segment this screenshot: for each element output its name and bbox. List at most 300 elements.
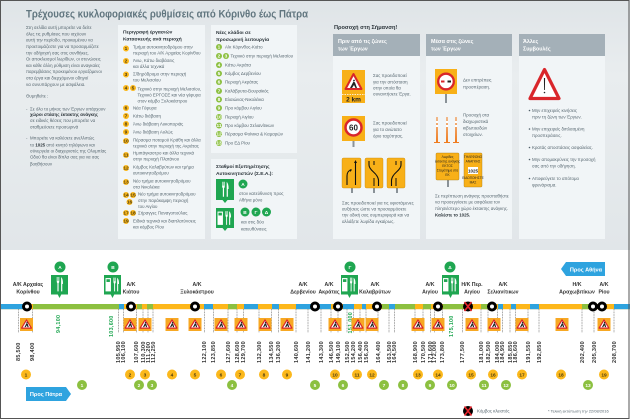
text: no overtaking: προσπέραση. — [463, 84, 490, 90]
intro text block: σταθμεύσετε προσωρινά — [30, 124, 79, 130]
badges B G D with note: κατευθύνσεις — [241, 226, 267, 232]
panel: new branches in temporary operation — [211, 25, 297, 153]
road strip with status segments — [0, 304, 630, 309]
kilometre labels: 205,300 — [592, 341, 598, 363]
kilometre labels: 111,200 — [146, 342, 152, 363]
kilometre labels: 134,550 — [269, 341, 275, 363]
text: separators: διαχωριστικά — [463, 119, 489, 124]
numbered works list: στα Νικολέικα — [133, 184, 160, 190]
panel header: Συμβουλές — [523, 46, 551, 52]
badges B G D with note — [240, 208, 271, 232]
yellow work number badges: 1 — [25, 372, 28, 378]
kilometre labels: 168,900 — [413, 341, 419, 363]
rest area: D — [442, 262, 459, 298]
interchange labels: Α/Κ — [600, 282, 609, 288]
panel header: Άλλες — [523, 39, 538, 45]
icon: emergency info signs: 1025 — [468, 168, 479, 174]
kilometre labels: 163,500 — [387, 341, 393, 363]
rest area: B: Β — [111, 265, 115, 271]
badges B G D with note: Γ — [255, 210, 258, 216]
kilometre labels: 181,000 — [479, 341, 485, 363]
kilometre labels: 164,500 — [392, 341, 398, 363]
numbered works list: 19 — [123, 218, 129, 224]
numbered works list: Άνω, Κάτω διαβάσεις — [133, 58, 174, 63]
numbered works list: Άνω διάβαση Αυλώς — [133, 130, 173, 134]
yellow work number badges: 8 — [263, 372, 266, 378]
legend: closed junction — [463, 406, 509, 416]
panel heading: Κατασκευής ανά περιοχή — [123, 36, 182, 42]
intro text block: σύνεργεία οι διαχειριστές της Ολυμπίας — [30, 148, 106, 154]
tips list: σας από την οδήγηση. — [532, 164, 576, 168]
numbered branches list: Προ κόμβου Σελιανίτικων — [225, 123, 275, 128]
kilometre labels: 202,400 — [580, 341, 586, 363]
yellow work number badges: 12 — [369, 372, 375, 378]
tips list: Αποφεύγετε το απότομο — [532, 176, 580, 181]
intro text block: Οι αποκλεισμοί λωρίδων, οι στενώσεις — [26, 56, 101, 62]
numbered works list: και άλλα τεχνικά — [133, 64, 165, 69]
interchange labels: Α/Κ — [325, 282, 334, 288]
green branch number badges: 7 — [383, 383, 386, 389]
green station km labels: 103,600 — [109, 315, 115, 337]
intro text block: χώροι στάσης έκτακτης ανάγκης — [30, 112, 99, 117]
interchange labels: Καλαβρύτων — [359, 290, 391, 296]
green branch number badges: 13 — [585, 383, 591, 389]
panel header: Πριν από τις ζώνες — [338, 39, 387, 45]
panel: works by area — [118, 25, 205, 239]
rest area: B — [104, 262, 121, 298]
numbered works list: 13 — [123, 180, 129, 186]
intro text block: - — [26, 106, 28, 112]
kilometre labels: 152,500 — [345, 341, 351, 363]
numbered works list: 2 — [125, 58, 128, 64]
kilometre labels: 106,100 — [121, 341, 127, 363]
green branch number badges — [77, 380, 593, 390]
kilometre labels: 98,400 — [30, 342, 36, 361]
numbered works list: 10 — [123, 138, 129, 144]
panel: service stations — [211, 159, 297, 239]
text: no overtaking: Δεν επιτρέπεις — [463, 78, 492, 82]
intro text block: Στη σελίδα αυτή μπορείτε να δείτε — [26, 25, 92, 30]
interchange labels: Α/Κ — [499, 282, 508, 288]
green branch number badges: 4 — [231, 383, 234, 389]
intro text block: να συνυπάρχουν με ασφάλεια. — [26, 82, 85, 87]
text: speed limit: για το ανώτατο — [373, 127, 402, 132]
kilometre labels: 146,500 — [329, 341, 335, 363]
numbered branches list: Περιοχή Αιγίου — [225, 114, 254, 120]
numbered works list: 14 — [123, 192, 129, 198]
text: lane change: την οδική σας συμπεριφορά και να — [342, 212, 410, 218]
numbered branches list — [216, 44, 294, 146]
numbered works list: 9 — [125, 130, 128, 136]
tips list: προσπεράσεις. — [532, 133, 562, 138]
green station km labels: 151,000 — [348, 312, 354, 334]
intro text block: βοηθήσουν — [30, 162, 53, 166]
kilometre labels: 107,600 — [134, 341, 140, 363]
kilometre labels: 110,300 — [141, 341, 147, 363]
text: separators: στοιχείων. — [463, 132, 483, 137]
numbered works list: του Αιγίου — [138, 204, 158, 209]
yellow work number badges: 4 — [171, 372, 174, 378]
kilometre labels: 156,400 — [358, 341, 364, 363]
intro text block: στα έργα και διερχόμενοι οδηγοί — [26, 76, 88, 80]
kilometre labels: 129,700 — [241, 341, 247, 363]
numbered works list: Τμήμα αυτοκινητοδρόμου στην — [133, 44, 193, 50]
intro text block: Οδού θα είναι δίπλα σας για να σας — [30, 154, 99, 160]
kilometre labels: 123,850 — [211, 341, 217, 363]
numbered branches list: 7 — [218, 88, 221, 94]
intro text block: προετοιμάζεστε για να προσαρμόζετε — [26, 44, 99, 49]
text: separators: κιβωτοειδών — [463, 126, 488, 130]
interchange labels: Α/Κ — [299, 282, 308, 288]
icon: lane change signs — [342, 158, 405, 193]
text: emergency instructions: Σε περίπτωση ανάγκης προσπαθήστε — [435, 194, 509, 198]
numbered works list: Ημιπάγκαστρο και άλλα τεχνικά — [133, 150, 194, 156]
kilometre labels: 136,200 — [276, 341, 282, 363]
numbered branches list: 9 — [218, 106, 221, 112]
numbered works list: Σήραγγες Παναγοπούλας — [138, 210, 188, 216]
numbered works list: τεχνικά στην περιοχή της Ακράτας — [133, 144, 199, 148]
interchange labels: Α/Κ — [193, 282, 202, 288]
intro text block: και κάθε άλλη ρύθμιση είναι αναγκαίες — [26, 63, 100, 68]
interchange labels: Η/Κ Περ. — [461, 282, 483, 288]
numbered branches list: Α/κ Κόρινθος-Κιάτο — [225, 44, 263, 50]
kilometre labels: 172,000 — [432, 341, 438, 363]
icon: emergency info signs: ΑΝΑΓΚΗΣ — [466, 160, 480, 164]
yellow work number badges: 10 — [332, 372, 338, 378]
rest area: G: Γ — [349, 265, 352, 271]
numbered works list: Νέα Γέφυρα — [133, 106, 157, 110]
green branch number badges: 8 — [402, 383, 405, 389]
yellow work number badges: 5 — [194, 372, 197, 378]
text: lane change: Σας προειδοποιεί για τις υφιστάμενες — [342, 200, 414, 206]
interchange labels: Η/Κ — [573, 282, 582, 288]
numbered works list: Τεχνικό στην περιοχή Μελισσίου, — [138, 86, 201, 92]
yellow work number badges: 17 — [519, 372, 525, 378]
text: speed limit: όριο ταχύτητας. — [373, 134, 403, 138]
panel header: των Έργων — [338, 46, 368, 52]
intro text block: αυτή την περίοδο, προκειμένου να — [26, 38, 93, 42]
numbered works list: 18 — [130, 210, 136, 216]
panel heading: Νέες κλάδοι σε — [216, 30, 251, 36]
panel header: Μέσα στις ζώνες — [431, 39, 474, 45]
numbered works list: 11 — [123, 152, 129, 158]
rest area: G — [341, 262, 358, 298]
icon: speed limit 60 sign: 60 — [349, 124, 358, 132]
tips list: Μην επιχειρείς κινήσεις — [532, 108, 577, 113]
numbered works list: 3 — [125, 72, 128, 78]
numbered branches list: Περιοχή Ακράτας — [225, 80, 258, 84]
text: lane change: αυξήσεις ώστε να προσαρμόσετε — [342, 206, 406, 212]
numbered works list: 6 — [125, 106, 128, 112]
numbered works list: Πέρασμα ποταμού Κράθη και άλλα — [133, 138, 201, 142]
kilometre labels — [16, 341, 618, 363]
yellow work number badges: 9 — [286, 372, 289, 378]
direction arrow: to Athens — [561, 262, 605, 276]
green branch number badges: 12 — [503, 383, 509, 389]
kilometre labels: 143,300 — [319, 341, 325, 363]
rest area: A: Α — [58, 265, 62, 271]
numbered works list: αυτοκινητοδρόμου — [133, 170, 169, 176]
intro text block: - — [26, 136, 28, 140]
numbered branches list: Κόμβος Δερβενίου — [225, 71, 261, 76]
kilometre labels: 112,250 — [151, 341, 157, 363]
icon: emergency info signs: ΤΗΛΕΦΩΝΟ — [464, 155, 483, 159]
numbered works list: Κόμβος Καλαβρύτων και τμήμα — [133, 164, 194, 170]
kilometre labels: 156,200 — [364, 341, 370, 363]
text: emergency instructions: να προσεγγίσετε με ασφάλεια τον — [435, 200, 501, 204]
badges B G D with note: Δ — [265, 210, 269, 216]
kilometre labels: 191,550 — [526, 341, 532, 363]
numbered works list: Άνω διάβαση Λυκοποριάς — [133, 122, 183, 126]
tips list: φρενάρισμα. — [532, 182, 557, 188]
numbered branches list: 3 — [225, 54, 228, 60]
numbered branches list: 12 — [216, 132, 222, 138]
interchange nodes — [24, 303, 606, 310]
interchange labels: Α/Κ — [127, 282, 136, 288]
kilometre labels: 171,600 — [428, 341, 434, 363]
tips list: Μην επιχειρείς διπλασμένη — [532, 126, 585, 132]
numbered branches list: Προ κόμβου Αιγίου — [225, 106, 262, 110]
numbered branches list: Καλάβρυτα-Βουραϊκός — [225, 88, 269, 94]
kilometre labels: 182,500 — [486, 341, 492, 363]
icon: no overtaking sign — [435, 69, 457, 103]
badge A with note: Αθήνα μόνο — [239, 198, 263, 202]
numbered works list: Τεχνικό ΕΡΓΟΣΕ και νέα γέφυρα — [138, 92, 201, 98]
interchange labels: Α/Κ — [426, 282, 435, 288]
numbered branches list: 6 — [218, 80, 221, 86]
numbered works list: Ειδικά τεχνικά και διαπλατύνσεις — [133, 218, 196, 224]
panel header — [519, 34, 605, 56]
interchange labels: Ξυλοκάστρου — [180, 290, 214, 296]
numbered branches list: 5 — [218, 71, 221, 77]
kilometre labels: 208,700 — [612, 341, 618, 363]
interchange labels: Κιάτου — [123, 290, 139, 296]
yellow work number badges — [21, 370, 609, 380]
numbered branches list: 13 — [216, 140, 222, 146]
numbered branches list: Τεχνικό στην περιοχή Μελισσίου — [230, 54, 294, 58]
green branch number badges: 9 — [429, 383, 432, 389]
icon: emergency info signs: ΕΙΔΟΠΟΙΗΣΤΕ — [462, 176, 484, 180]
title: Τρέχουσες κυκλοφοριακές ρυθμίσεις από Κόρινθο έως Πάτρα — [26, 9, 308, 21]
tips list: πριν τη ζώνη των Έργων. — [532, 114, 582, 120]
numbered works list: Σ/δηρόδρομο στην περιοχή — [133, 72, 187, 76]
panel header — [426, 34, 512, 56]
numbered works list: 8 — [125, 122, 128, 128]
legend: closed junction: Κόμβος κλειστός — [477, 408, 509, 414]
numbered works list: Νέο τμήμα αυτοκινητοδρόμου — [138, 192, 196, 196]
green station km labels: 94,100 — [56, 315, 62, 333]
yellow work number badges: 15 — [468, 372, 474, 378]
kilometre labels: 170,500 — [421, 341, 427, 363]
green branch number badges: 6 — [342, 383, 345, 389]
road work signs — [20, 318, 610, 331]
text: distance warning: Σας προειδοποιεί — [373, 73, 407, 78]
numbered works list: 4 — [125, 86, 128, 92]
intro text block: Μπορείτε να καλέσετε ανελλιπώς — [30, 136, 94, 140]
kilometre labels: 127,600 — [226, 341, 232, 363]
interchange labels: Κορίνθου — [16, 290, 40, 296]
icon: food station — [216, 179, 234, 203]
text: emergency instructions: πλησιέστερο χώρο έκτακτης ανάγκης. — [435, 206, 508, 211]
kilometre labels: 177,500 — [460, 341, 466, 363]
kilometre labels: 173,800 — [440, 341, 446, 363]
kilometre labels: 149,100 — [336, 341, 342, 363]
numbered works list: 7 — [125, 114, 128, 120]
numbered works list: 15 — [130, 192, 136, 198]
numbered works list — [123, 44, 201, 230]
yellow work number badges: 18 — [558, 372, 564, 378]
intro text block: παρεμβάσεις προκειμένου εργαζόμενοι — [26, 69, 102, 74]
green station km labels — [56, 312, 455, 337]
icon: emergency info signs: Σταμάτημα στα — [437, 168, 458, 172]
kilometre labels: 185,850 — [508, 341, 514, 363]
signage heading: Προσοχή στη Σήμανση! — [334, 25, 397, 31]
yellow work number badges: 14 — [435, 372, 441, 378]
numbered works list: 17 — [123, 210, 129, 216]
green station km labels: 175,100 — [449, 315, 455, 337]
numbered branches list: 8 — [218, 97, 221, 103]
text: distance warning: συναντήσετε Έργα. — [373, 92, 411, 96]
rest area: D: Δ — [448, 265, 452, 271]
text: distance warning: για την απόσταση — [373, 80, 408, 84]
interchange labels: Α/Κ — [371, 282, 380, 288]
direction arrow: to Patra: Προς Πάτρα — [30, 392, 63, 398]
panel heading: Σταθμοί Εξυπηρέτησης — [216, 164, 270, 170]
icon: traffic cones — [434, 117, 459, 143]
direction arrow: to Athens: Προς Αθήνα — [570, 268, 603, 274]
badge A with note: Α — [241, 182, 245, 188]
top background band — [0, 0, 630, 250]
numbered works list: στην παράκαμψη περιοχή — [138, 198, 189, 203]
numbered works list: Νέο τμήμα αυτοκινητοδρόμου — [133, 178, 191, 184]
kilometre labels: 184,000 — [495, 341, 501, 363]
numbered branches list: Ελαιώνας-Νικολέικα — [225, 97, 264, 102]
icon: emergency info signs: ΕΚΤΟΣ — [442, 164, 453, 168]
interchange labels: Ακράτας — [318, 290, 340, 296]
direction arrow: to Patra — [26, 387, 71, 401]
numbered works list: στον κόμβο Ξυλοκάστρου — [138, 98, 188, 104]
kilometre labels: 192,850 — [537, 341, 543, 363]
interchange labels: Δερβενίου — [290, 290, 316, 296]
intro text block: το 1025 από κινητό τηλέφωνο και — [30, 142, 95, 148]
intro text block — [26, 25, 106, 166]
intro text block: Σε όλο το μήκος των Έργων υπάρχουν — [30, 106, 106, 112]
badges B G D with note: Β — [243, 210, 247, 216]
numbered branches list: 2 — [218, 54, 221, 60]
green branch number badges: 1 — [81, 383, 84, 389]
numbered branches list: Προ ΕΔ Ρίου — [225, 140, 251, 146]
icon: warning triangle — [530, 70, 559, 98]
green branch number badges: 11 — [481, 383, 487, 389]
intro text block: Θυμηθείτε : — [26, 94, 48, 98]
icon: emergency info signs — [435, 153, 484, 187]
numbered branches list: 1 — [218, 44, 221, 50]
numbered branches list: 11 — [216, 123, 222, 129]
rest area: A — [51, 262, 68, 298]
panel header: των Έργων — [431, 46, 461, 52]
numbered works list: στην περιοχή Πλατάνου — [133, 156, 180, 162]
icon: emergency info signs: έκτακτης ανάγκης — [435, 160, 460, 164]
kilometre labels: 122,100 — [202, 341, 208, 363]
yellow work number badges: 3 — [144, 372, 147, 378]
closed junction marker — [463, 302, 473, 312]
yellow work number badges: 16 — [490, 372, 496, 378]
kilometre labels: 128,600 — [235, 341, 241, 363]
numbered works list: του Μελισσίου — [133, 78, 161, 82]
numbered works list: 12 — [123, 166, 129, 172]
numbered works list: 1 — [125, 46, 128, 52]
text: speed limit: Σας προειδοποιεί — [373, 120, 407, 126]
kilometre labels: 140,600 — [294, 341, 300, 363]
interchange labels: Αιγίου — [422, 290, 438, 296]
tips list: Μην απομακρύνεις την προσοχή — [532, 157, 596, 162]
green branch number badges: 5 — [314, 383, 317, 389]
numbered branches list: Κάτω Ακράτα — [225, 62, 251, 68]
panel heading: προσωρινή λειτουργία — [216, 37, 269, 43]
numbered works list: 16 — [127, 200, 132, 206]
badge A with note — [238, 180, 284, 202]
icon: works ahead 2 km sign — [342, 70, 365, 104]
numbered works list: Κάτω διάβαση — [133, 114, 161, 118]
kilometre labels: 105,950 — [116, 341, 122, 363]
icon: speed limit 60 sign — [342, 116, 365, 147]
icon: fuel and food station — [216, 208, 234, 231]
icon: emergency info signs: ΕΚ — [445, 173, 450, 177]
panel header — [333, 34, 420, 56]
icon: works ahead 2 km sign: 2 km — [346, 96, 361, 104]
kilometre labels: 132,300 — [257, 341, 263, 363]
text: separators: Προσοχή στα — [463, 112, 489, 118]
numbered branches list: Πέρασμα Φοίνικα & Καμαρών — [225, 132, 284, 136]
yellow work number badges: 2 — [129, 372, 132, 378]
interchange labels: Σελιανίτικων — [487, 290, 519, 296]
panel: before work zones — [333, 34, 420, 239]
text: lane change: αλλάξετε λωρίδα εγκαίρως. — [342, 219, 395, 224]
yellow work number badges: 19 — [601, 372, 607, 378]
interchange labels: Αιγίου — [464, 290, 480, 296]
green branch number badges: 2 — [138, 383, 141, 389]
numbered works list: και κόμβος Ρίου — [133, 224, 165, 230]
kilometre labels: 164,400 — [376, 341, 382, 363]
badges B G D with note: και στις δύο — [241, 220, 264, 224]
kilometre labels: 141,200 — [306, 341, 312, 363]
kilometre labels: 184,950 — [500, 341, 506, 363]
kilometre labels: 154,200 — [351, 341, 357, 363]
numbered works list: περιοχή του Α/Κ Αρχαίας Κορίνθου — [133, 50, 201, 56]
yellow work number badges: 13 — [415, 372, 421, 378]
footnote: * Τελική εκτύπωση την 22/08/2016 — [548, 408, 610, 414]
green branch number badges: 3 — [151, 383, 154, 389]
numbered branches list: 4 — [218, 62, 221, 68]
intro text block: όλες τις ρυθμίσεις που ισχύουν — [26, 32, 87, 36]
yellow work number badges: 6 — [220, 372, 223, 378]
tips list — [529, 108, 596, 188]
panel: inside work zones — [426, 34, 512, 239]
icon: emergency info signs: ΜΑΣ — [470, 180, 476, 184]
kilometre labels: 85,500 — [16, 342, 22, 361]
yellow work number badges: 7 — [239, 372, 242, 378]
kilometre marker lines — [18, 309, 614, 333]
panel: other tips — [519, 34, 605, 239]
numbered works list: 5 — [132, 86, 135, 92]
interchange labels: Ρίου — [598, 290, 610, 296]
intro text block: σε ειδικές θέσεις που μπορείτε να — [30, 118, 96, 123]
green branch number badges: 10 — [449, 383, 455, 389]
tips list: Κρατάς αποστάσεις ασφαλείας. — [532, 145, 593, 150]
kilometre labels: 186,600 — [513, 341, 519, 363]
interchange labels: Αραχωβιτίκων — [559, 290, 595, 296]
interchange labels: Α/Κ Αρχαίας — [13, 282, 44, 288]
